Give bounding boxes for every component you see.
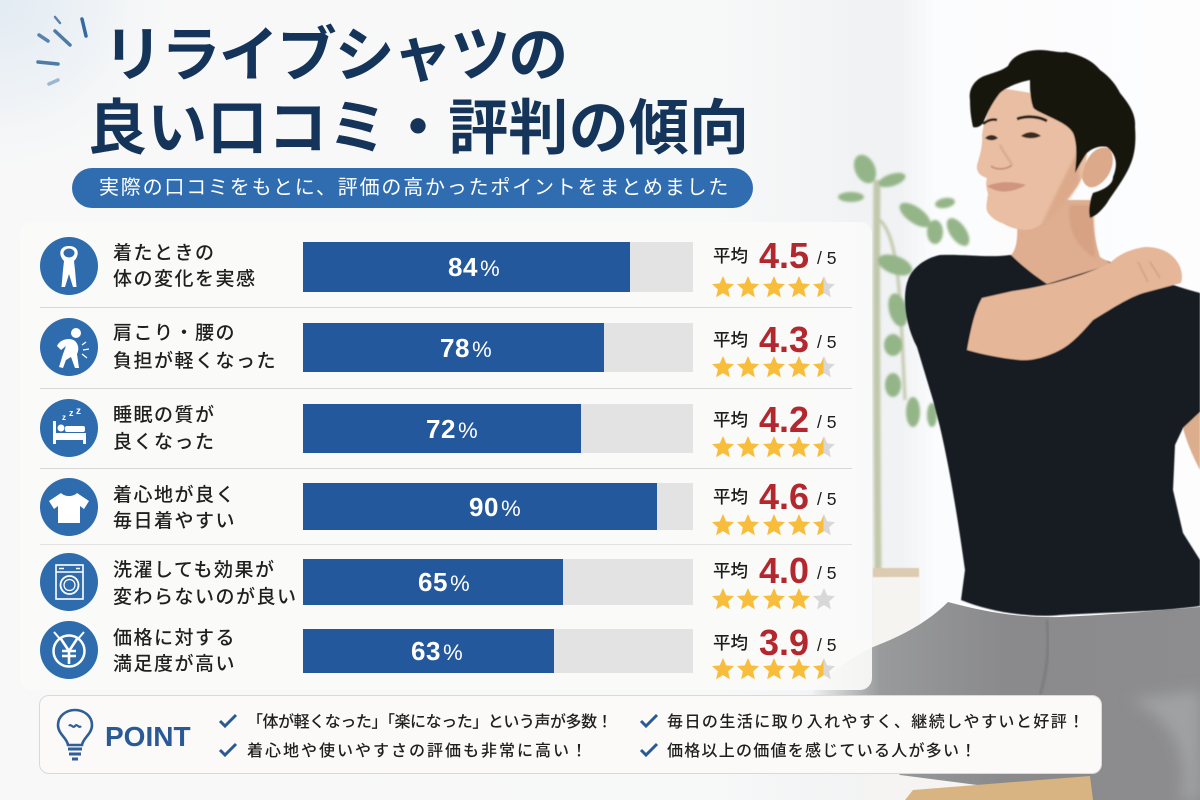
rating: / 5 [817,563,836,583]
face [977,88,1087,230]
row 6: price [40,621,836,680]
heading: POINT: POINT [105,721,191,752]
label: 睡眠の質が [113,405,216,426]
icon: bed: z [76,406,81,417]
check 1 [219,714,237,728]
rating [713,399,836,440]
bar: 65%: 65% [418,567,470,597]
facial features [983,117,1047,192]
wooden box [905,776,1093,800]
pot [873,575,920,650]
check 3 [640,714,658,728]
label [113,484,236,532]
icon: person with sore back [40,318,98,376]
label: 変わらないのが良い [113,587,298,608]
row 3: sleep [40,399,836,458]
panel: ratings background [20,222,872,690]
bar: 78%: 78% [440,332,492,362]
rating [713,235,836,276]
title line 2: 良い口コミ・評判の傾向 [87,80,749,167]
bar: 84%: 84% [448,252,500,282]
hair [970,50,1135,218]
title line 1: リライブシャツの [103,7,566,94]
bar: 90% [303,483,693,530]
rating: 4.0 [759,550,809,591]
rating [713,550,836,591]
row 2: shoulder and back [40,318,836,378]
rating: / 5 [817,332,836,352]
point text 3: 毎日の生活に取り入れやすく、継続しやすいと好評！ [667,714,1086,731]
subtitle pill [72,168,753,208]
label: 着心地が良く [113,485,236,506]
label: 良くなった [113,432,216,453]
stars [712,514,835,536]
bar: 78% [303,323,693,372]
plant [838,151,974,575]
subtitle pill: 実際の口コミをもとに、評価の高かったポイントをまとめました [99,177,730,199]
icon: stretching person [40,237,98,295]
stars [712,276,835,298]
rating [713,476,836,517]
pants [810,602,1200,800]
bar: 90%: 90% [469,492,521,522]
rating: 平均 [713,330,748,350]
rating: 平均 [713,487,748,507]
rating: / 5 [817,412,836,432]
rating: 平均 [713,410,748,430]
label: 満足度が高い [113,654,236,675]
rating: 平均 [713,561,748,581]
label [113,404,216,453]
rating [713,622,836,663]
point text 1: 「体が軽くなった」「楽になった」という声が多数！ [247,714,612,731]
rating: 4.3 [759,319,809,360]
icon: yen coin [40,621,98,679]
bar: 63% [303,629,693,673]
label: 負担が軽くなった [113,351,277,372]
point text 2: 着心地や使いやすさの評価も非常に高い！ [247,743,589,760]
rating: / 5 [817,489,836,509]
rating: 4.6 [759,476,809,517]
row dividers [40,307,852,308]
row 1: body change [40,235,836,298]
check 4 [640,743,658,757]
rating: 4.2 [759,399,809,440]
bar: 63%: 63% [411,636,463,666]
ear [1082,147,1113,187]
label: 毎日着やすい [113,511,236,532]
label [113,323,277,372]
point text 4: 価格以上の価値を感じている人が多い！ [667,743,978,760]
far right arm [1183,412,1200,470]
icon: bed [40,399,98,457]
label: 体の変化を実感 [113,269,257,290]
label [113,560,298,608]
decorative sparkle icon [36,16,88,86]
label: 洗濯しても効果が [113,560,275,581]
rating: / 5 [817,248,836,268]
rating: 3.9 [759,622,809,663]
stars [712,436,835,458]
arm and hand [967,247,1182,360]
row 4: comfort [40,476,836,536]
label: 価格に対する [113,628,236,649]
label [113,628,236,675]
panel: point summary [39,695,1102,774]
bar: 65% [303,559,693,605]
stars [712,658,835,680]
row 5: washing [40,550,836,611]
t-shirt [905,255,1200,616]
rating: 平均 [713,633,748,653]
icon: bed: z [62,413,66,422]
label: 肩こり・腰の [113,323,236,344]
rating: 4.5 [759,235,809,276]
rating: 平均 [713,246,748,266]
icon: washing machine [40,553,98,611]
rating [713,319,836,360]
icon: t-shirt [40,478,98,536]
icon: light bulb [56,708,94,760]
rating: / 5 [817,635,836,655]
label [113,242,257,290]
neck [1011,200,1112,284]
check 2 [219,743,237,757]
bar: 72% [303,404,693,453]
icon: bed: z [69,408,74,418]
stars [712,356,835,378]
bar: 72%: 72% [426,414,478,444]
label: 着たときの [113,243,216,264]
bar: 84% [303,242,693,292]
stars [712,588,835,610]
